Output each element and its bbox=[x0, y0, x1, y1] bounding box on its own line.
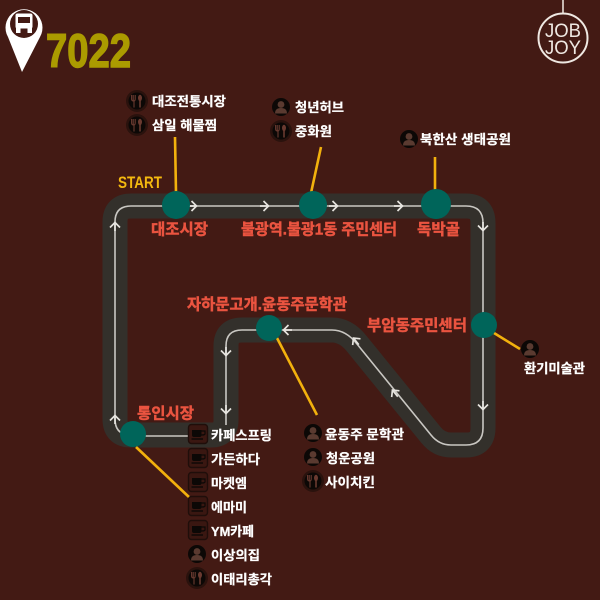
place group: 윤동주문학관 bbox=[302, 424, 404, 492]
place group: 통인시장: 카페스프링 bbox=[211, 428, 272, 443]
place group: 통인시장: 가든하다 bbox=[211, 452, 260, 467]
place group: 윤동주문학관: 사이치킨 bbox=[325, 475, 375, 490]
station labels bbox=[137, 220, 467, 422]
route band bbox=[115, 206, 483, 445]
place group: 불광역 bbox=[270, 98, 344, 142]
stations bbox=[120, 189, 497, 447]
place group: 통인시장: 에마미 bbox=[211, 500, 247, 515]
leader lines bbox=[136, 137, 520, 498]
place group: 독박골 bbox=[400, 130, 511, 148]
place group: 부암동: 환기미술관 bbox=[524, 361, 585, 376]
logo: Job Joy bbox=[538, 0, 588, 62]
place group: 대조시장: 대조전통시장 bbox=[152, 94, 226, 109]
place group: 윤동주문학관: 윤동주 문학관 bbox=[325, 427, 404, 442]
station labels: 대조시장 bbox=[151, 220, 208, 238]
place group: 통인시장: 이태리총각 bbox=[211, 572, 272, 587]
place group: 통인시장 bbox=[186, 424, 272, 589]
station labels: 통인시장 bbox=[137, 404, 194, 422]
logo: Job Joy: JOY bbox=[545, 38, 581, 59]
direction arrows bbox=[110, 201, 488, 424]
station labels: 부암동주민센터 bbox=[367, 316, 467, 334]
route line bbox=[115, 206, 483, 445]
place group: 부암동 bbox=[521, 340, 585, 376]
place group: 통인시장: 마켓엠 bbox=[211, 476, 247, 491]
logo: Job Joy: JOB bbox=[545, 21, 581, 42]
station labels: 독박골 bbox=[417, 220, 460, 238]
place group: 불광역: 청년허브 bbox=[295, 100, 344, 115]
place group: 대조시장 bbox=[126, 90, 226, 136]
route map bbox=[110, 201, 488, 445]
place group: 대조시장: 삼일 해물찜 bbox=[152, 118, 217, 133]
station labels: 불광역.불광1동 주민센터 bbox=[241, 220, 397, 238]
place group: 독박골: 북한산 생태공원 bbox=[420, 132, 511, 147]
place group: 통인시장: 이상의집 bbox=[211, 548, 260, 563]
place group: 불광역: 중화원 bbox=[295, 124, 332, 139]
station labels: 자하문고개.윤동주문학관 bbox=[187, 296, 347, 314]
title: route number: 7022 bbox=[46, 24, 131, 77]
start label: START bbox=[118, 173, 162, 192]
place group: 통인시장: YM카페 bbox=[211, 524, 254, 539]
place group: 윤동주문학관: 청운공원 bbox=[326, 451, 375, 466]
icon: bus location pin bbox=[6, 9, 43, 72]
